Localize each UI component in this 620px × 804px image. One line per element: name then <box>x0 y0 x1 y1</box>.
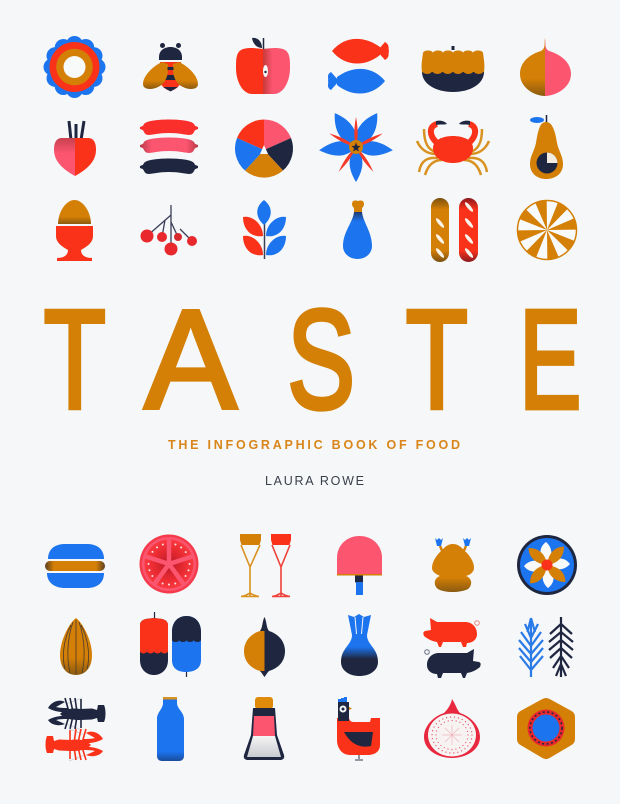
icon: onion <box>520 38 571 96</box>
icon: segmented wheel <box>235 120 293 178</box>
icon: paint tube <box>244 697 284 760</box>
icon: pinwheel plate <box>517 535 577 595</box>
icon: citrus fruit half <box>244 617 285 677</box>
icon: pear <box>530 115 563 179</box>
icon: crab <box>417 121 489 175</box>
icon: fig half <box>424 699 480 758</box>
icon: two pigs <box>423 618 481 678</box>
icon: almond <box>60 618 92 675</box>
icon: berries <box>140 205 197 256</box>
icon: tomato slice <box>140 534 198 594</box>
icon: star flower <box>319 109 393 182</box>
icon: sausages <box>140 120 198 174</box>
icon: mushroom <box>337 536 382 595</box>
title: TASTE: T <box>406 282 468 439</box>
icon: fennel bulb <box>341 614 378 676</box>
title: TASTE: S <box>287 282 355 439</box>
icon: pie <box>422 46 484 92</box>
icon: lobsters <box>46 698 106 761</box>
subtitle: THE INFOGRAPHIC BOOK OF FOOD <box>168 438 460 452</box>
title: TASTE <box>44 281 581 439</box>
icon: egg in egg cup <box>56 200 93 261</box>
icon: apple <box>236 38 290 94</box>
icon: flower <box>43 36 106 98</box>
icon: chicken drumstick <box>343 200 372 259</box>
icon: baguettes <box>431 198 478 262</box>
icon: donut <box>524 705 568 752</box>
icon: hen <box>337 697 380 760</box>
icon: wine glasses <box>240 534 291 596</box>
icon: citrus wheel <box>517 200 577 260</box>
title: TASTE: T <box>44 282 106 439</box>
title: TASTE: E <box>519 282 581 439</box>
title: TASTE: A <box>144 281 237 438</box>
icon: two fish <box>328 39 389 94</box>
icon: two capsule fruits <box>140 612 201 677</box>
icon: blue and navy herb sprigs <box>519 617 573 677</box>
icon: leaf sprig <box>243 200 286 259</box>
icon: bee <box>143 43 198 92</box>
icon: milk bottle <box>157 697 184 761</box>
icon: roast chicken <box>432 538 474 592</box>
icon: beetroot <box>54 121 96 176</box>
icon: macaron <box>45 544 105 588</box>
author: LAURA ROWE <box>265 474 364 488</box>
